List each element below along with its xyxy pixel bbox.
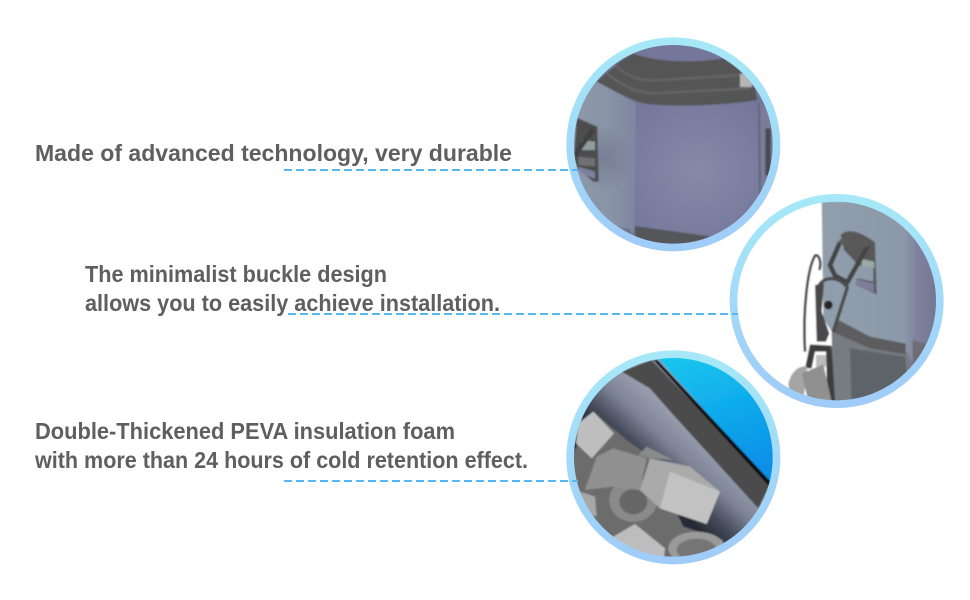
- clip cord: [804, 255, 820, 352]
- text: insulation foam: Double-Thickened PEVA insulation foam: [35, 418, 455, 444]
- buckle: [574, 118, 599, 182]
- right seam and tag: [759, 103, 780, 198]
- text: insulation foam: [34, 418, 528, 473]
- snap hook: [819, 279, 847, 332]
- photo circle: cooler bag body: [566, 37, 780, 251]
- text: buckle design: The minimalist buckle design: [85, 261, 387, 287]
- swivel ring and strap: [805, 344, 835, 402]
- link: [830, 242, 868, 282]
- text: durable technology: Made of advanced technology, very durable: [35, 140, 512, 166]
- text: insulation foam: with more than 24 hours of cold retention effect.: [34, 447, 528, 473]
- cans: [570, 412, 723, 563]
- photo circle: insulated interior with ice: [566, 350, 783, 565]
- pocket edge band: [832, 320, 906, 354]
- lid zip band: [597, 53, 757, 106]
- left side panel: [570, 82, 636, 232]
- mesh pocket: [832, 332, 917, 405]
- buckle shadow: [598, 137, 619, 180]
- dark rim: [622, 360, 770, 508]
- buckle strap loop: [841, 231, 877, 294]
- text: buckle design: [85, 261, 500, 316]
- lid top: [648, 57, 709, 62]
- leader line: durable technology: [284, 169, 578, 171]
- lower trim: [634, 226, 710, 244]
- blue interior corner: [658, 358, 773, 484]
- ice cubes: [576, 412, 614, 458]
- backing panel: [820, 202, 936, 366]
- photo circle: buckle and clip: [730, 194, 944, 408]
- leader line: insulation foam: [284, 480, 578, 482]
- text: buckle design: allows you to easily achieve installation.: [85, 290, 500, 316]
- leader line: buckle design: [288, 313, 738, 315]
